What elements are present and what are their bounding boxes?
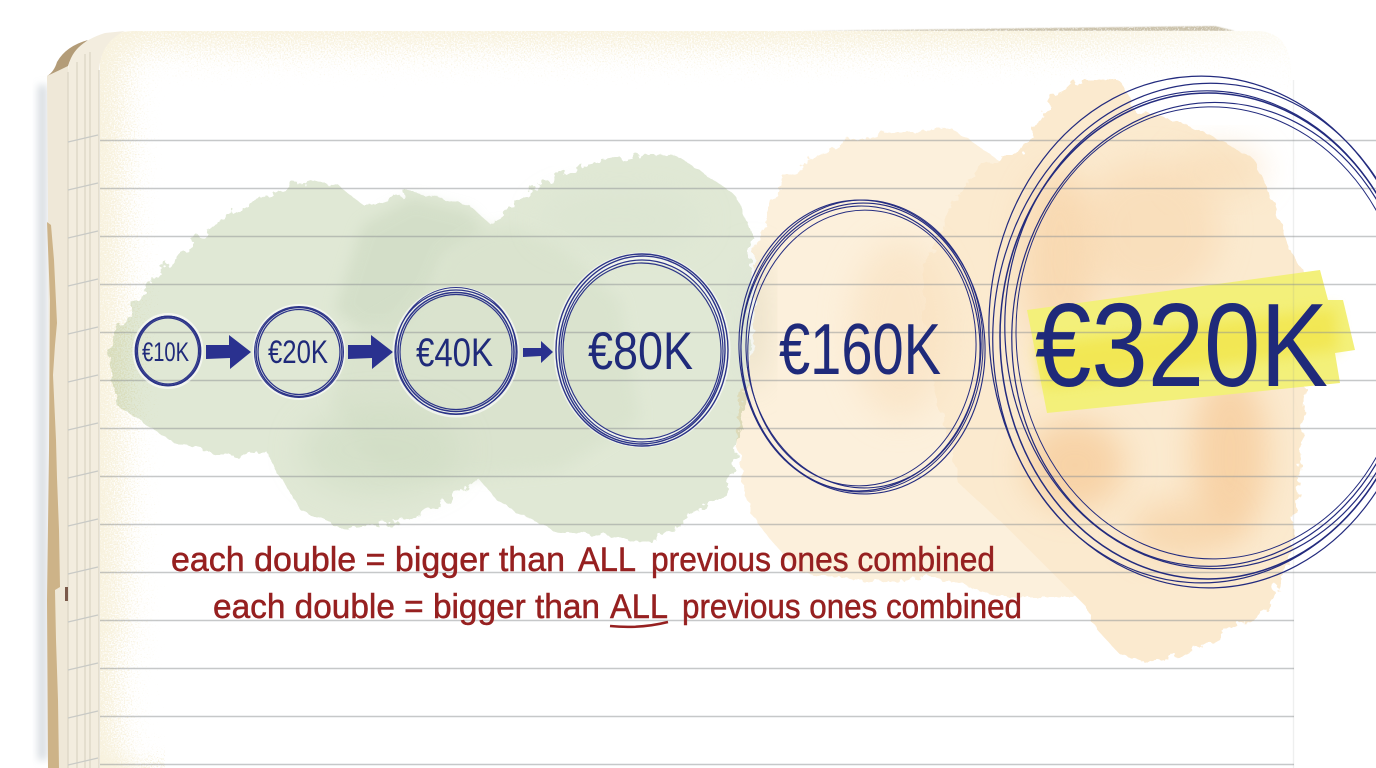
handwritten note line 2: ALL [610,588,668,626]
circle: 320K [976,65,1376,599]
watercolor: orange wash [742,86,1300,656]
arrow 20K to 40K [348,335,393,369]
arrow 10K to 20K [206,335,251,369]
circle: 80K [556,253,728,447]
handwritten note line 2 [213,588,1022,626]
page stack and torn spine [47,31,125,768]
label: €10K [142,337,189,367]
watercolor: green wash [114,160,766,535]
solid white page area [165,100,1292,768]
circle: 10K [135,316,201,386]
handwritten note line 2: previous ones combined [682,588,1022,626]
circle: 40K [395,288,517,414]
arrows between the first circles [206,335,553,369]
page back top edge [800,26,1235,31]
yellow highlighter behind 320K [1027,270,1355,413]
label: €20K [268,334,328,370]
underline under ALL [610,622,668,627]
worn white page centre [122,46,1312,746]
cast shadow on left of notebook [38,85,47,760]
worn white strip at lower left of page [122,640,192,768]
handwritten note line 1 [171,541,995,579]
handwritten note line 1: ALL [578,541,636,579]
circle: 20K [254,306,344,398]
label: €40K [416,331,493,375]
white right margin [1292,0,1376,768]
handwritten note line 2: each double = bigger than [213,588,600,626]
label: €160K [779,310,941,390]
handwritten note line 1: previous ones combined [651,541,995,579]
label: €80K [588,322,693,381]
circle: 160K [731,194,993,500]
label: €320K [1035,279,1328,412]
handwritten note line 1: each double = bigger than [171,541,565,579]
arrow 40K to 80K [523,341,553,363]
